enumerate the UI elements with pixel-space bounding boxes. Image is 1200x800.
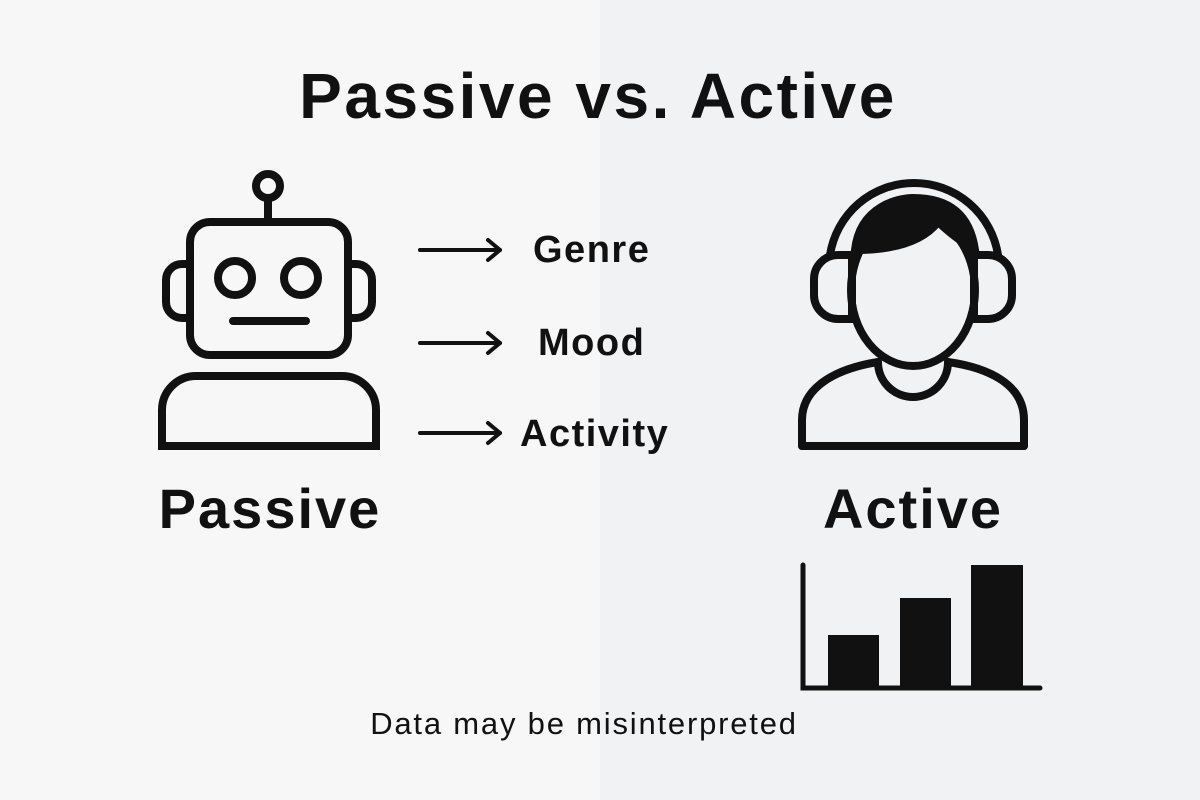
label: Active: Active xyxy=(823,477,1003,540)
label: Passive: Passive xyxy=(159,477,381,540)
bar chart xyxy=(803,565,1040,688)
title: Passive vs. Active xyxy=(299,60,897,132)
arrows with labels: Mood xyxy=(538,322,645,364)
arrows with labels: Activity xyxy=(520,413,669,455)
footer note: Data may be misinterpreted xyxy=(370,706,798,741)
arrows with labels xyxy=(420,229,669,455)
icon: person with headphones xyxy=(802,183,1024,446)
icon: robot xyxy=(162,174,376,446)
arrows with labels: Genre xyxy=(533,229,650,271)
